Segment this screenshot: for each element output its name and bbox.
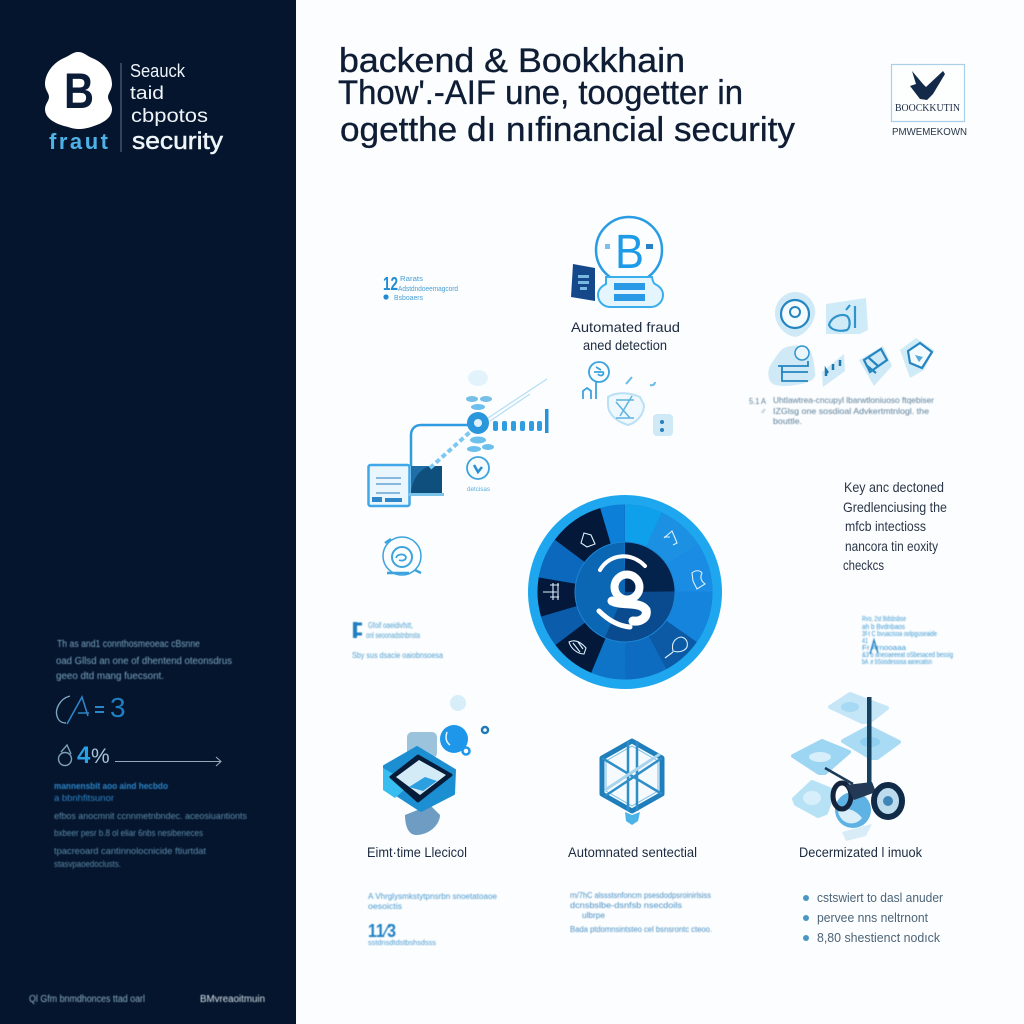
heading: automated sentectial: Automnated sentectial xyxy=(568,844,697,860)
icon group: five security icons xyxy=(768,292,934,387)
callout: small blue list xyxy=(862,614,953,666)
sidebar body text xyxy=(54,781,247,870)
text block: key and detection: checkcs xyxy=(843,557,884,573)
caption: security icons: Uhtlawtrea-cncupyl lbarwtloniuoso ftqebiser xyxy=(773,395,934,405)
wheel segment icons xyxy=(543,531,705,658)
sidebar body text: tpacreoard cantinnolocnicide ftiurtdat xyxy=(54,846,206,857)
sidebar footer xyxy=(29,994,265,1005)
caption: security icons: IZGlsg one sosdioal Advkertmtnlogl. the xyxy=(773,406,929,416)
laptop xyxy=(408,466,444,496)
wheel hub xyxy=(600,567,650,617)
document card xyxy=(368,465,410,506)
logo tagline xyxy=(130,61,223,155)
callout: 12 stat: 12 xyxy=(383,274,398,294)
callout: left list xyxy=(352,621,443,660)
caption: security icons: 5.1 A xyxy=(749,396,766,406)
sidebar intro text xyxy=(56,639,232,682)
callout: small blue list: 3f-t C bvuacisoa oolpguseaide xyxy=(862,629,937,638)
sidebar body text: a bbnhfitsunor xyxy=(54,793,114,804)
icon: hexagon lattice xyxy=(602,741,662,825)
stat: 4 percent with arrow: % xyxy=(91,745,110,768)
illustration: tiles and wheels xyxy=(793,694,902,841)
icon: B globe on base xyxy=(571,217,663,307)
text block: key and detection: Gredlenciusing the xyxy=(843,499,947,515)
callout: small blue list: Fr Arnooaaa xyxy=(862,643,907,652)
logo tagline: cbpotos xyxy=(131,106,208,127)
text block: column two: ulbrpe xyxy=(582,911,606,920)
bullet list: column three: pervee nns neltrnont xyxy=(817,910,928,925)
small badge: detcisas xyxy=(467,487,490,493)
callout: left list: Gfoif oaeidivfstt, xyxy=(368,621,413,630)
text block: column two: rn/7hC alssstsnfoncm psesdodpsroinirlsiss xyxy=(570,891,711,900)
heading: decentralized: Decermizated l imuok xyxy=(799,844,923,860)
heading: real-time: Eimt·time Llecicol xyxy=(367,844,467,860)
icon: ring symbol xyxy=(383,537,421,575)
floating bubbles xyxy=(440,695,488,754)
callout: left list: onl seoonadstnbnsta xyxy=(366,631,420,640)
icon group: fraud detection xyxy=(583,362,673,436)
heading: automated fraud xyxy=(571,319,680,353)
logo tagline: Seauck xyxy=(130,61,186,81)
text block: key and detection xyxy=(843,479,947,573)
chart: central circular wheel xyxy=(528,495,722,689)
panel: dark sidebar xyxy=(0,0,296,1024)
small badge xyxy=(467,457,490,493)
central node and beads xyxy=(466,370,494,452)
heading: automated fraud: aned detection xyxy=(583,337,667,353)
text block: column one xyxy=(368,892,498,947)
sidebar intro text: geeo dtd mang fuecsont. xyxy=(56,671,164,682)
title: backend & Bookkhain xyxy=(339,42,685,80)
text block: column one: 11⁄3 xyxy=(368,921,396,941)
callout: 12 stat: Bsboaers xyxy=(394,293,423,302)
stat: 4 percent with arrow xyxy=(58,742,221,769)
stamp badge xyxy=(892,64,967,138)
bullet list: column three: cstswiert to dasl anuder xyxy=(817,890,944,905)
text block: column one: sstdnsdtdstbshsdsss xyxy=(368,940,437,947)
arrow xyxy=(115,757,221,766)
callout: small blue list: 41 xyxy=(862,636,868,645)
caption: security icons xyxy=(749,395,934,426)
logo tagline: security xyxy=(132,128,223,155)
caption: security icons: ♂ xyxy=(760,406,766,416)
title: ogetthe dı nıfinancial security xyxy=(340,111,795,149)
callout: small blue list: ah b Bvdnbaos xyxy=(862,622,905,631)
title: Thow'.-AIF une, toogetter in xyxy=(338,74,743,112)
sidebar body text: mannensbit aoo aind hecbdo xyxy=(54,781,168,792)
text block: column two xyxy=(570,891,712,934)
icon: isometric screen cube xyxy=(383,695,488,835)
text block: column one: oesoictis xyxy=(368,902,402,911)
bead chain xyxy=(493,409,548,433)
text block: key and detection: Key anc dectoned xyxy=(844,479,944,495)
icon: mouse xyxy=(58,745,72,766)
callout: 12 stat xyxy=(383,274,458,302)
sidebar body text: bxbeer pesr b.8 ol eliar 6nbs nesibeneces xyxy=(54,828,203,839)
icon: check mark xyxy=(910,71,945,100)
tiles xyxy=(793,694,899,816)
icon: white B badge xyxy=(45,52,112,129)
callout: 12 stat: Adstdndoeemagcord xyxy=(398,284,458,293)
callout: small blue list: Rvo, 2st Bdsbsbse xyxy=(862,614,906,623)
text block: column two: dcnsbslbe-dsnfsb nsecdoils xyxy=(570,901,682,910)
logo tagline: taid xyxy=(130,83,164,103)
text block: column one: A Vhrglysmkstytpnsrbn snoetatoaoe xyxy=(368,892,498,901)
text block: key and detection: mfcb intectioss xyxy=(845,518,926,534)
wheel segments xyxy=(556,524,694,660)
text block: column two: Bada ptdomnsintsteo cel bsnsrontc cteoo. xyxy=(570,925,712,934)
heading: automated fraud: Automated fraud xyxy=(571,319,680,335)
logo word: fraut: fraut xyxy=(49,129,109,154)
sidebar intro text: oad Gllsd an one of dhentend oteonsdrus xyxy=(56,656,232,667)
sidebar footer: BMvreaoitmuin xyxy=(200,994,265,1005)
connector line xyxy=(411,425,468,466)
bullet list: column three xyxy=(803,890,944,945)
bullet list: column three: 8,80 shestienct nodıck xyxy=(817,930,940,945)
icon: B globe on base: B xyxy=(615,226,644,279)
title xyxy=(338,42,795,149)
text block: key and detection: nancora tin eoxity xyxy=(845,538,938,554)
callout: small blue list: bA .e bSoisdessosa aanecatisn xyxy=(862,657,932,666)
stat: A = 3 xyxy=(57,692,126,724)
callout: small blue list: &3 b aneoaeeeat oSbesaced bessig xyxy=(862,650,953,659)
stamp badge: BOOCKKUTIN xyxy=(895,102,960,114)
sidebar logo xyxy=(45,52,223,155)
caption: security icons: bouttle. xyxy=(773,416,802,426)
callout: left list: Sby sus dsacie oaiobnsoesa xyxy=(352,651,443,660)
sidebar footer: Ql Gfm bnmdhonces ttad oarl xyxy=(29,994,145,1005)
illustration: network and data flow xyxy=(368,370,548,506)
dark card xyxy=(571,264,595,301)
stamp badge: PMWEMEKOWN xyxy=(892,127,967,138)
icon: white B badge: B xyxy=(64,63,94,119)
sidebar body text: stasvpaoedoclusts. xyxy=(54,859,121,870)
sidebar intro text: Th as and1 connthosmeoeac cBsnne xyxy=(57,639,200,650)
icon: white S mark xyxy=(599,556,646,627)
callout: 12 stat: Rarats xyxy=(400,276,424,283)
sidebar body text: efbos anocmnit ccnnmetnbndec. aceosiuantionts xyxy=(54,811,247,822)
stat: 4 percent with arrow: 4 xyxy=(77,742,91,769)
stat: A = 3: 3 xyxy=(110,692,126,723)
